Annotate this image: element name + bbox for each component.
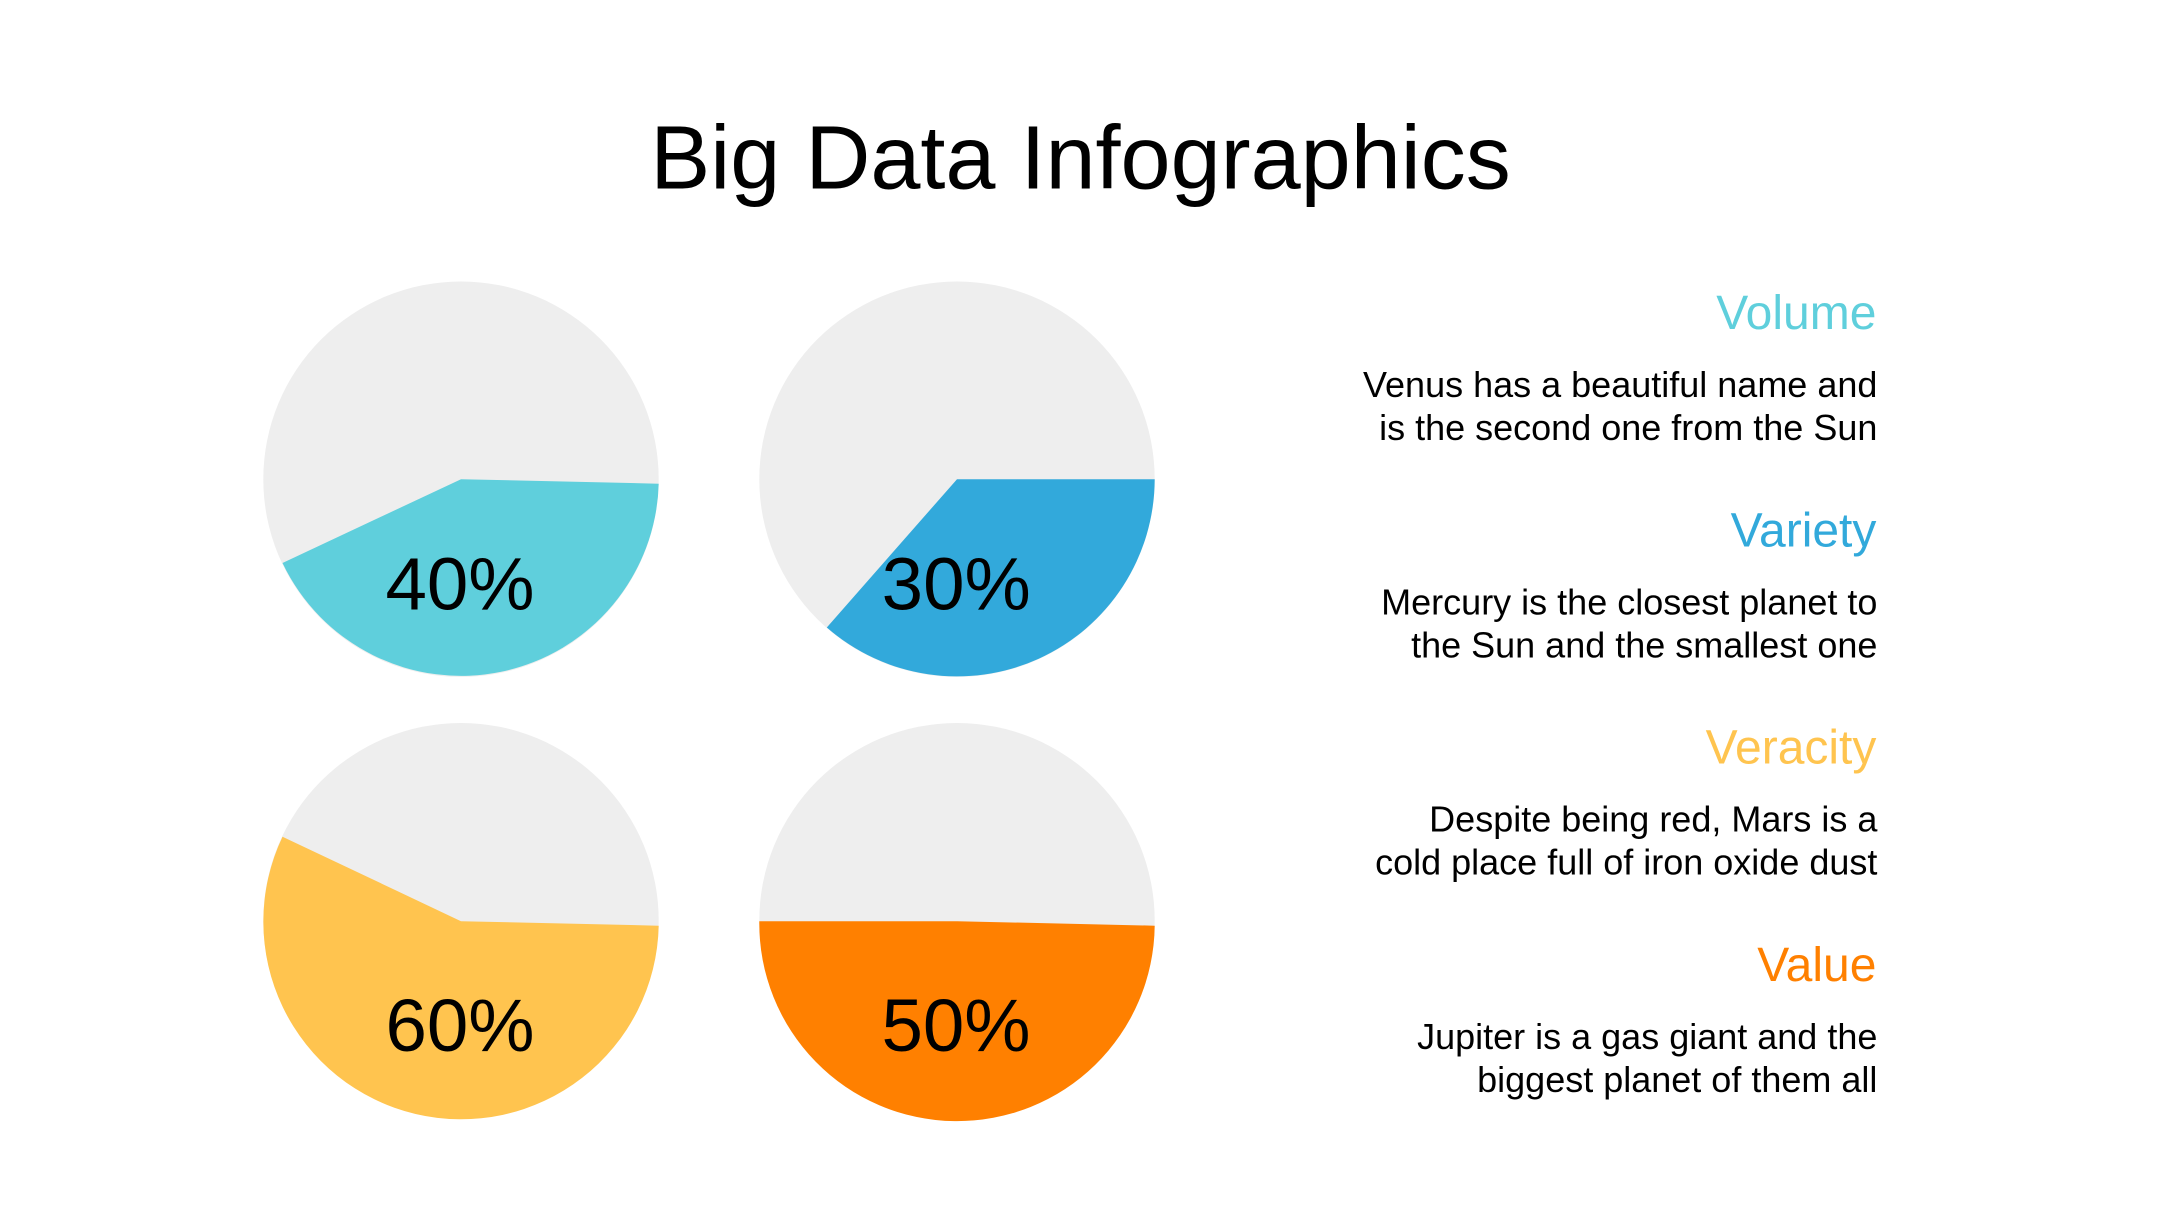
text block: veracity: Despite being red, Mars is a xyxy=(1429,799,1878,840)
title: Big Data Infographics xyxy=(650,108,1511,208)
pie chart: volume 40%: 40% xyxy=(385,542,535,626)
pie chart: veracity 60%: 60% xyxy=(385,984,535,1067)
pie chart: variety 30% xyxy=(759,282,1155,677)
text block: value xyxy=(1417,939,1877,1100)
text block: volume: Volume xyxy=(1716,287,1876,340)
pie chart: value 50%: 50% xyxy=(881,984,1031,1067)
text block: variety: Variety xyxy=(1731,504,1876,557)
text block: volume xyxy=(1363,287,1877,448)
text block: value: Jupiter is a gas giant and the xyxy=(1417,1016,1877,1057)
text block: veracity xyxy=(1375,722,1878,883)
text block: veracity: Veracity xyxy=(1706,722,1876,775)
pie chart: veracity 60% xyxy=(263,723,659,1119)
text block: value: biggest planet of them all xyxy=(1477,1059,1877,1100)
text block: value: Value xyxy=(1757,939,1876,992)
text block: variety: the Sun and the smallest one xyxy=(1411,624,1877,665)
text block: variety xyxy=(1381,504,1877,665)
text block: veracity: cold place full of iron oxide dust xyxy=(1375,842,1877,883)
pie chart: volume 40% xyxy=(263,282,659,677)
text block: volume: is the second one from the Sun xyxy=(1379,407,1877,448)
text block: variety: Mercury is the closest planet to xyxy=(1381,581,1877,622)
pie chart: variety 30%: 30% xyxy=(882,542,1031,626)
text block: volume: Venus has a beautiful name and xyxy=(1363,364,1877,405)
pie chart: value 50% xyxy=(759,723,1155,1121)
